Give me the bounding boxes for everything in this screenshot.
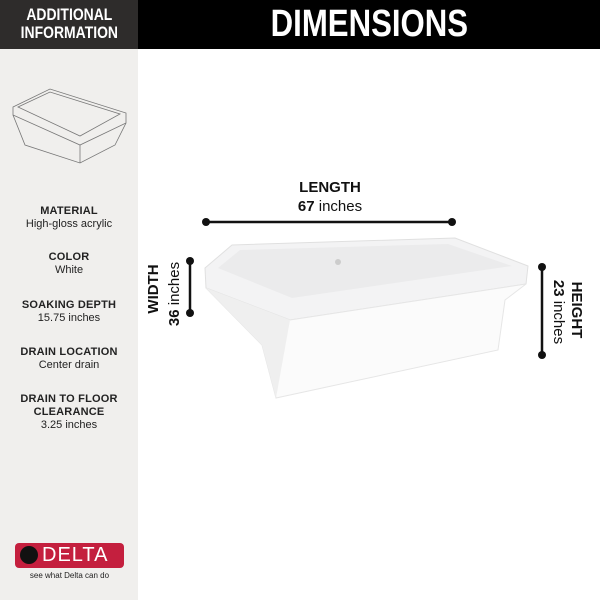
text: drain to floor clearance: DRAIN TO FLOOR [20, 393, 118, 405]
text: color: White [55, 264, 83, 276]
text: color [49, 251, 89, 276]
tub image [204, 238, 528, 398]
text: 36 inches [166, 262, 183, 326]
logo: delta [15, 543, 124, 580]
left panel background [0, 0, 138, 600]
header: additional information [0, 0, 138, 49]
length label [298, 179, 362, 215]
width label: WIDTH [145, 264, 162, 314]
text: drain location: Center drain [39, 359, 99, 371]
header: additional information: ADDITIONAL [26, 5, 112, 24]
arrow: width [186, 257, 194, 317]
text: soaking depth: 15.75 inches [38, 312, 100, 324]
logo: delta: see what Delta can do [30, 571, 109, 580]
text: drain to floor clearance: CLEARANCE [34, 406, 104, 418]
text: HEIGHT [568, 282, 585, 338]
text: soaking depth [22, 299, 116, 324]
header: dimensions: DIMENSIONS [270, 3, 468, 45]
text: drain location: DRAIN LOCATION [20, 346, 118, 358]
arrow: length [202, 218, 456, 226]
arrow: height [538, 263, 546, 359]
icon: tub line drawing [12, 88, 126, 164]
text: drain to floor clearance [20, 393, 118, 431]
text: drain to floor clearance: 3.25 inches [41, 419, 97, 431]
text: soaking depth: SOAKING DEPTH [22, 299, 116, 311]
text: material: High-gloss acrylic [26, 218, 112, 230]
header: dimensions [138, 0, 600, 49]
text: color: COLOR [49, 251, 89, 263]
logo: delta: DELTA [42, 544, 108, 566]
header: additional information: INFORMATION [20, 23, 118, 42]
length label: 67 inches [298, 198, 362, 215]
length label: LENGTH [299, 179, 361, 196]
text: material [26, 205, 112, 230]
text: material: MATERIAL [40, 205, 98, 217]
height label: 23 inches [550, 280, 567, 344]
text: drain location [20, 346, 118, 371]
